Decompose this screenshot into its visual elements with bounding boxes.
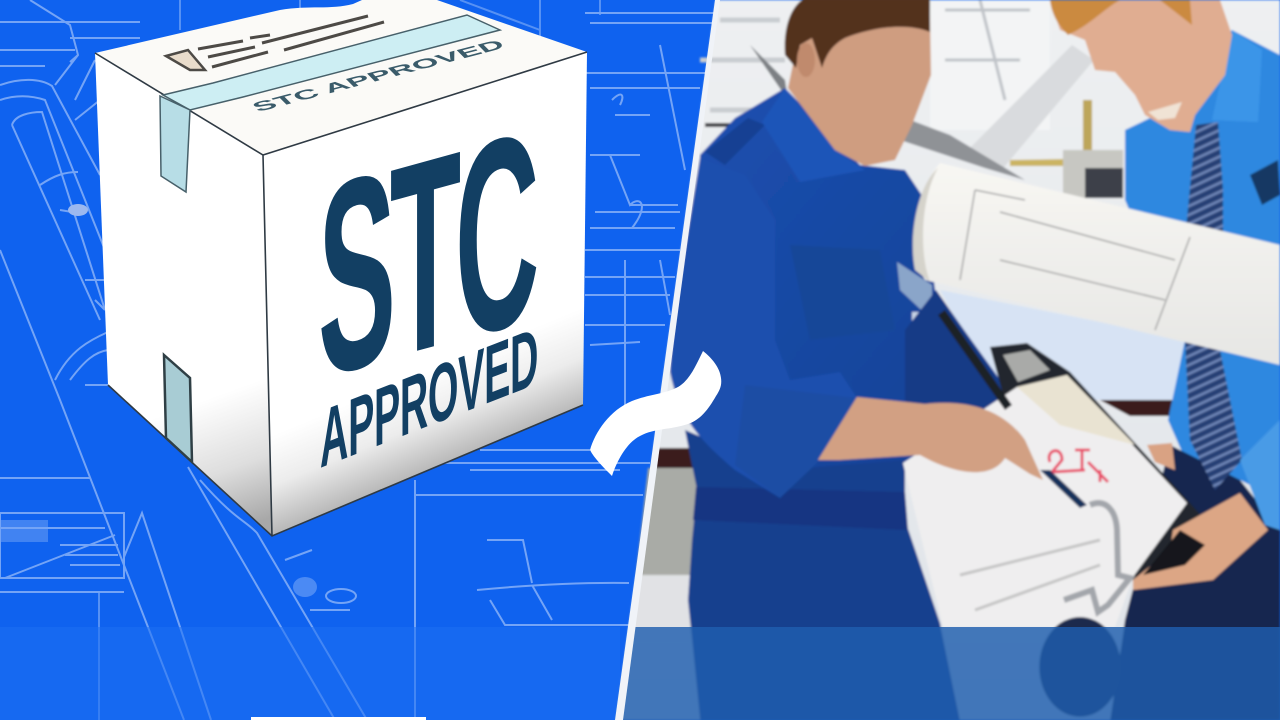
white diagonal divider <box>615 0 720 720</box>
chest pocket <box>790 245 895 340</box>
white wave arrow <box>590 351 721 476</box>
bottom translucent band <box>0 627 1280 720</box>
strap <box>938 310 1012 410</box>
right man's hands and folder <box>1133 443 1268 590</box>
dark binder end under clip <box>1039 617 1121 717</box>
mouth <box>1148 102 1182 120</box>
name patches <box>897 262 932 320</box>
dark trousers <box>1110 445 1280 720</box>
man in coverall <box>670 0 1022 720</box>
sleeve <box>670 158 857 498</box>
lower torso and trousers <box>685 430 960 720</box>
blueprint line drawing <box>0 0 715 720</box>
APPROVED lettering: APPROVED <box>320 309 538 486</box>
main STC lettering: STC <box>318 71 539 436</box>
badge <box>1250 160 1280 205</box>
binder <box>903 310 1205 627</box>
ear <box>797 43 815 77</box>
dark shaded side <box>905 290 1020 455</box>
shoulder strap <box>705 118 765 165</box>
table surface and floor <box>940 290 1190 400</box>
hangar background <box>616 0 1280 720</box>
bottom white tab <box>251 717 426 720</box>
box right face <box>263 52 587 536</box>
sleeve <box>1240 420 1280 530</box>
collar <box>762 88 865 182</box>
box edges <box>95 52 587 536</box>
sleeve cuff <box>735 385 857 498</box>
man in shirt <box>1050 0 1280 720</box>
hair <box>1050 0 1192 35</box>
forearm and hand of man in coverall <box>818 397 1043 480</box>
head <box>1050 0 1232 132</box>
box top face <box>95 0 587 155</box>
binder clip <box>1064 503 1130 612</box>
collar <box>1212 30 1262 122</box>
aircraft strut and propeller blade <box>750 45 1123 198</box>
packing tape <box>160 15 500 462</box>
right photo panel <box>616 0 1280 720</box>
tie <box>1185 122 1223 240</box>
pen <box>1040 470 1087 508</box>
red marking <box>1049 450 1108 482</box>
shipping label on top <box>166 16 384 70</box>
neck and face <box>788 15 931 166</box>
left blueprint background <box>0 0 720 720</box>
small print on box top: STC APPROVED <box>248 38 510 115</box>
STC approved box <box>95 0 587 536</box>
hangar window <box>700 0 1050 130</box>
blueprint roll <box>913 163 1280 365</box>
box left face <box>95 53 272 536</box>
hair <box>785 0 930 68</box>
